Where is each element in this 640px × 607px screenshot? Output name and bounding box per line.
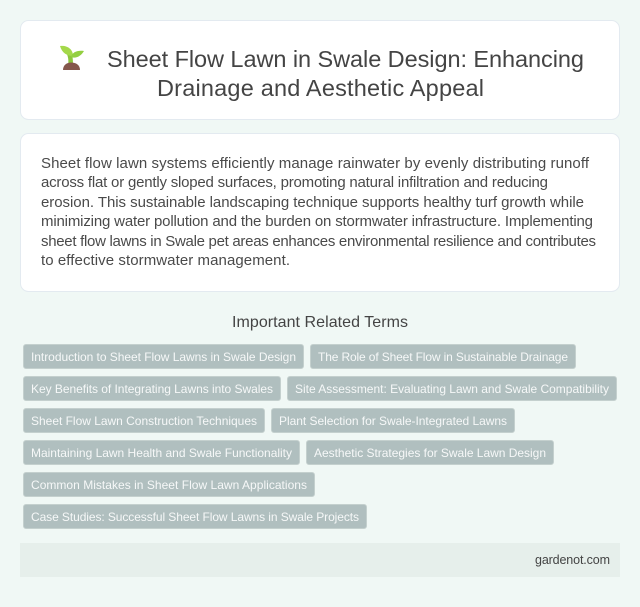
text block: summary: Sheet flow lawn systems efficiently manage rainwater by evenly distributing runoff xyxy=(41,155,590,172)
title xyxy=(107,46,584,101)
text block: summary: minimizing water pollution and the burden on stormwater infrastructure. Implementing xyxy=(41,213,593,230)
tag: Common Mistakes in Sheet Flow Lawn Applications xyxy=(31,478,307,492)
tag xyxy=(288,376,616,400)
tag xyxy=(24,472,314,496)
panel: title card xyxy=(20,20,620,120)
tag: Case Studies: Successful Sheet Flow Lawns in Swale Projects xyxy=(31,510,359,524)
tag: Introduction to Sheet Flow Lawns in Swale Design xyxy=(31,350,296,364)
tag: Maintaining Lawn Health and Swale Functionality xyxy=(31,446,292,460)
text block: summary: across flat or gently sloped surfaces, promoting natural infiltration and reducing xyxy=(41,174,548,191)
icon: seedling xyxy=(60,46,84,70)
tag: Plant Selection for Swale-Integrated Lawns xyxy=(279,414,507,428)
title: Drainage and Aesthetic Appeal xyxy=(157,75,484,101)
heading: related terms: Important Related Terms xyxy=(232,314,408,331)
tag xyxy=(24,504,366,528)
tag xyxy=(24,344,304,368)
tag xyxy=(24,408,264,432)
tag xyxy=(306,440,554,464)
tag xyxy=(310,344,576,368)
text block: summary: sheet flow lawns in Swale pet areas enhances environmental resilience and contributes xyxy=(41,233,596,250)
tag xyxy=(24,376,280,400)
tag: Aesthetic Strategies for Swale Lawn Design xyxy=(314,446,546,460)
tag list xyxy=(24,344,616,528)
footer: gardenot.com xyxy=(535,553,610,567)
tag: Key Benefits of Integrating Lawns into Swales xyxy=(31,382,273,396)
panel: summary card xyxy=(20,134,620,292)
title: Sheet Flow Lawn in Swale Design: Enhancing xyxy=(107,46,584,72)
tag: The Role of Sheet Flow in Sustainable Drainage xyxy=(318,350,568,364)
tag: Site Assessment: Evaluating Lawn and Swale Compatibility xyxy=(295,382,609,396)
text block: summary xyxy=(41,155,596,269)
text block: summary: to effective stormwater management. xyxy=(41,252,290,269)
tag: Sheet Flow Lawn Construction Techniques xyxy=(31,414,257,428)
footer xyxy=(20,543,620,577)
text block: summary: erosion. This sustainable landscaping technique supports healthy turf growth while xyxy=(41,194,584,211)
tag xyxy=(272,408,514,432)
tag xyxy=(24,440,300,464)
